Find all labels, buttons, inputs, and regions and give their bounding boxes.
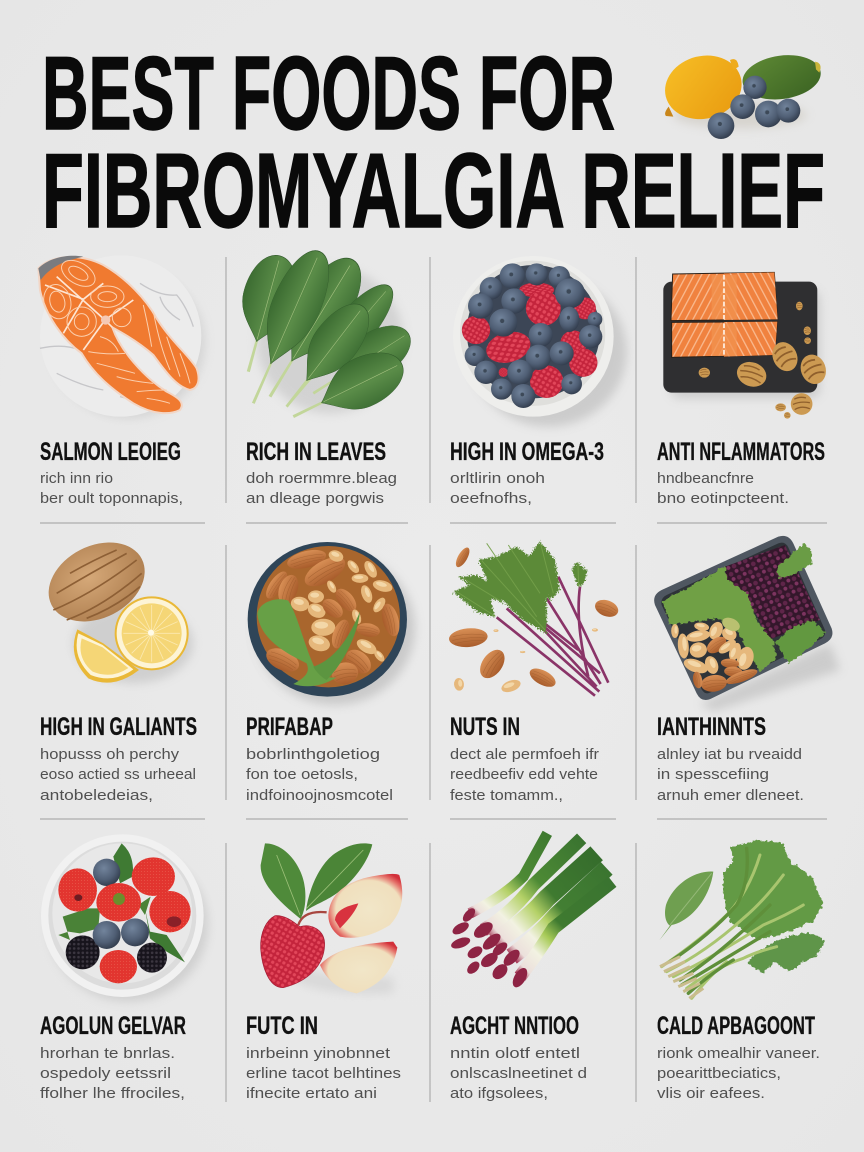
body text: bno eotinpcteent.	[657, 491, 789, 507]
body text: dect ale permfoeh ifr	[450, 747, 599, 763]
panel: leafy greens	[657, 840, 823, 1102]
body text: vlis oir eafees.	[657, 1086, 765, 1102]
icon: raspberry, leaves and sliced fruit	[261, 843, 402, 993]
panel: almonds and fern stems	[448, 542, 621, 804]
icon: tray with greens, berries and nuts	[654, 536, 840, 712]
panel: mixed nuts bowl	[246, 542, 415, 804]
icon: spinach leaves	[224, 242, 420, 439]
body text: erline tacot belhtines	[246, 1066, 401, 1082]
body text	[450, 1046, 587, 1102]
body text: bobrlinthgoletiog	[246, 747, 380, 763]
leaf	[257, 599, 337, 686]
body text: doh roermmre.bleag	[246, 471, 397, 487]
single leaf	[659, 872, 713, 940]
title	[42, 36, 825, 250]
body text: ber oult toponnapis,	[40, 491, 183, 507]
body text: hopusss oh perchy	[40, 747, 180, 763]
icon: salmon fillets and walnuts on slate	[663, 272, 830, 419]
body text	[450, 471, 545, 507]
panel: spring onions	[450, 833, 612, 1102]
body text	[657, 471, 789, 507]
heading: PRIFABAP	[246, 713, 333, 741]
panel: salad tray	[654, 536, 840, 804]
panel: raspberry and plum	[246, 843, 402, 1102]
body text: ifnecite ertato ani	[246, 1086, 377, 1102]
icon: bowl of mixed nuts with leaf	[248, 542, 415, 705]
body text: rionk omealhir vaneer.	[657, 1046, 820, 1062]
icon: plate of mixed berries	[41, 834, 208, 1002]
fern fronds	[453, 542, 587, 633]
heading: NUTS IN	[450, 713, 520, 741]
body text: poearittbeciatics,	[657, 1066, 781, 1082]
heading: FUTC IN	[246, 1012, 318, 1040]
body text: indfoinoojnosmcotel	[246, 788, 393, 804]
body text: reedbeefiv edd vehte	[450, 767, 598, 783]
body text: in spesscefiing	[657, 767, 769, 783]
body text: inrbeinn yinobnnet	[246, 1046, 390, 1062]
body text: feste tomamm.,	[450, 788, 563, 804]
body text: ato ifgsolees,	[450, 1086, 548, 1102]
body text	[246, 747, 393, 804]
body text: onlscaslneetinet d	[450, 1066, 587, 1082]
panel: berry plate	[40, 834, 208, 1102]
heading: AGCHT NNTIOO	[450, 1012, 579, 1040]
panel: spinach leaves	[224, 242, 420, 507]
icon: leafy green bunch and leaf	[659, 840, 823, 998]
decorative dividers	[40, 257, 827, 1102]
panel: berry bowl	[450, 256, 627, 507]
heading: HIGH IN OMEGA-3	[450, 438, 604, 466]
body text: an dleage porgwis	[246, 491, 384, 507]
icon: bowl of blueberries and raspberries	[453, 256, 627, 427]
heading: SALMON LEOIEG	[40, 438, 181, 466]
body text: arnuh emer dleneet.	[657, 788, 804, 804]
body text: hrorhan te bnrlas.	[40, 1046, 175, 1062]
icon: almonds and purple-stemmed greens	[448, 542, 621, 696]
body text	[450, 747, 599, 804]
body text: rich inn rio	[40, 471, 113, 487]
icon: salmon steak on marble	[38, 255, 205, 418]
body text	[40, 471, 183, 507]
panel: walnut and lemon	[35, 527, 197, 804]
body text	[246, 471, 397, 507]
body text	[657, 1046, 820, 1102]
body text	[657, 747, 804, 804]
body text: orltlirin onoh	[450, 471, 545, 487]
body text	[40, 1046, 185, 1102]
heading: IANTHINNTS	[657, 713, 766, 741]
body text: oeefnofhs,	[450, 491, 532, 507]
heading: RICH IN LEAVES	[246, 438, 386, 466]
panel: salmon fillets on slate	[657, 272, 830, 507]
body text	[246, 1046, 401, 1102]
icon: lemon, cucumber and blueberries	[658, 48, 824, 139]
icon: walnut and lemon slices	[35, 527, 193, 683]
heading: AGOLUN GELVAR	[40, 1012, 186, 1040]
heading: HIGH IN GALIANTS	[40, 713, 197, 741]
body text: alnley iat bu rveaidd	[657, 747, 802, 763]
body text: hndbeancfnre	[657, 471, 754, 487]
body text: antobeledeias,	[40, 788, 153, 804]
body text: ospedoly eetssril	[40, 1066, 171, 1082]
body text: fon toe oetosls,	[246, 767, 358, 783]
body text: ffolher lhe ffrociles,	[40, 1086, 185, 1102]
icon: spring onions	[450, 833, 612, 990]
body text: eoso actied ss urheeal	[40, 767, 196, 783]
body text: nntin olotf entetl	[450, 1046, 580, 1062]
body text	[40, 747, 196, 804]
panel: salmon steak	[38, 255, 205, 507]
